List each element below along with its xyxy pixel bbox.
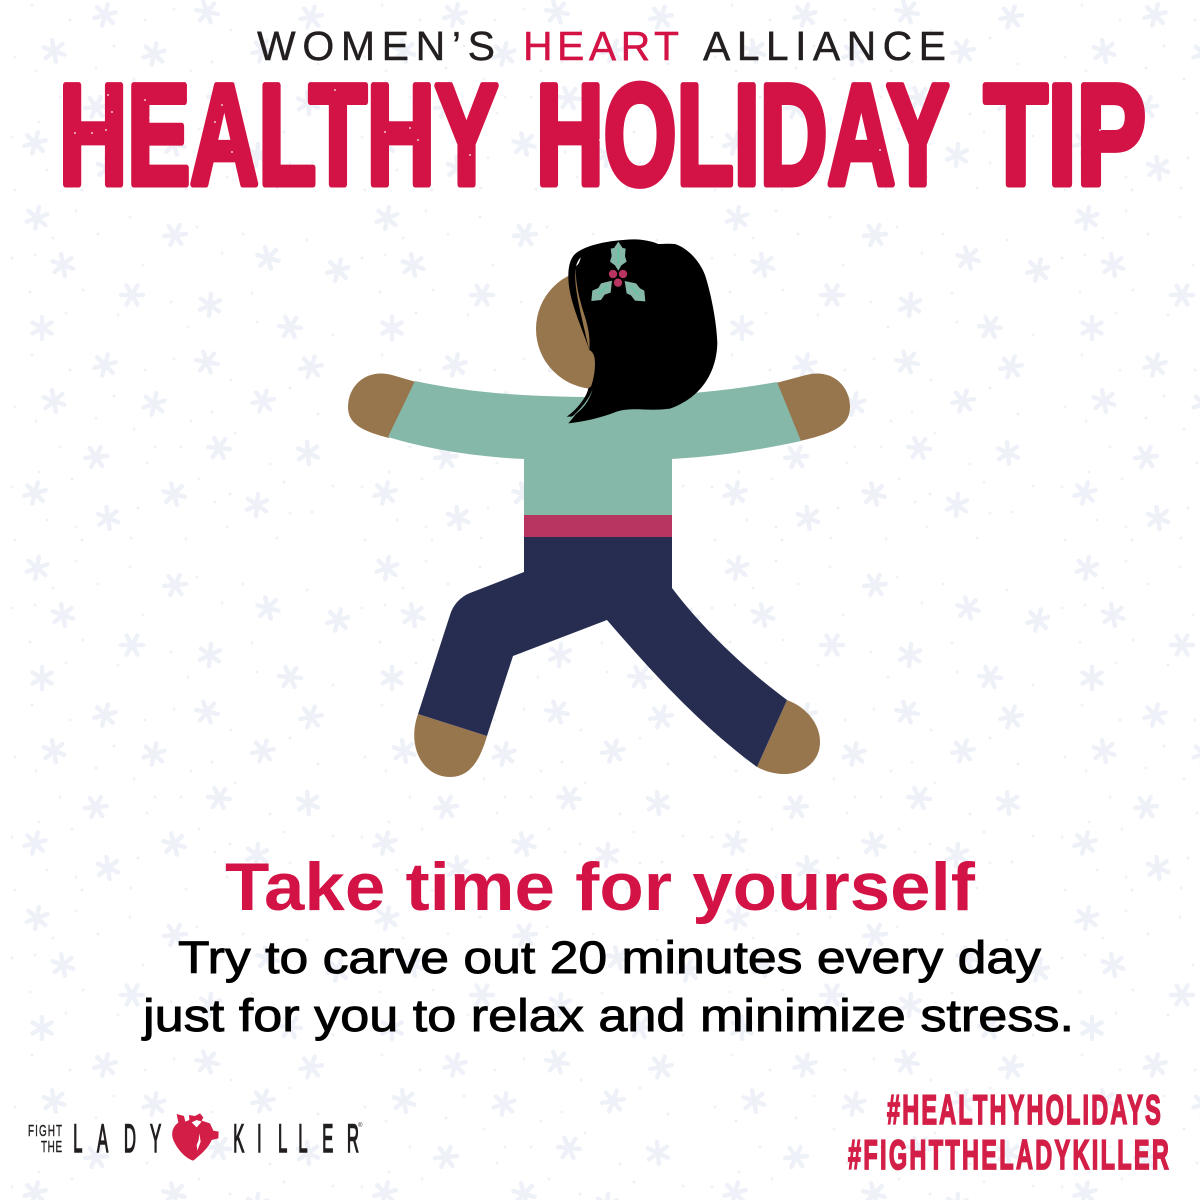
hashtags: #FIGHTTHELADYKILLER <box>848 1132 1169 1179</box>
head <box>536 269 656 389</box>
illustration: gingerbread woman stretching <box>348 239 850 777</box>
header: Women's Heart Alliance: WOMEN’S <box>257 23 495 69</box>
header: Women's Heart Alliance: ALLIANCE <box>703 23 946 69</box>
title: Healthy Holiday Tip <box>59 56 1146 215</box>
logo wordmark: KILLER <box>233 1117 359 1161</box>
logo: Fight the Lady Killer <box>28 1113 363 1161</box>
body text: just for you to relax and minimize stress. <box>141 990 1074 1041</box>
pants <box>418 537 787 767</box>
title: Healthy Holiday Tip: HEALTHY <box>59 56 498 215</box>
hashtags: #HEALTHYHOLIDAYS <box>887 1087 1161 1134</box>
logo wordmark: THE <box>41 1138 62 1156</box>
header: Women's Heart Alliance: HEART <box>523 23 679 69</box>
header: Women's Heart Alliance <box>257 23 946 69</box>
hands <box>348 373 850 441</box>
body text <box>141 932 1074 1041</box>
logo wordmark: ® <box>358 1122 363 1129</box>
sweater <box>388 381 801 516</box>
holly hair clip <box>591 242 645 301</box>
logo wordmark <box>28 1117 363 1161</box>
icon: anatomical heart <box>172 1113 219 1161</box>
hair <box>567 239 717 423</box>
belt <box>524 515 672 538</box>
logo wordmark: LADY <box>73 1117 161 1161</box>
title: Healthy Holiday Tip: HOLIDAY <box>536 56 949 215</box>
body text: Try to carve out 20 minutes every day <box>178 932 1042 983</box>
heading: Take time for yourself: Take time for yourself <box>225 849 975 925</box>
hashtags <box>848 1087 1169 1179</box>
logo wordmark: FIGHT <box>28 1122 62 1140</box>
title: Healthy Holiday Tip: TIP <box>984 56 1146 215</box>
feet <box>414 700 820 777</box>
